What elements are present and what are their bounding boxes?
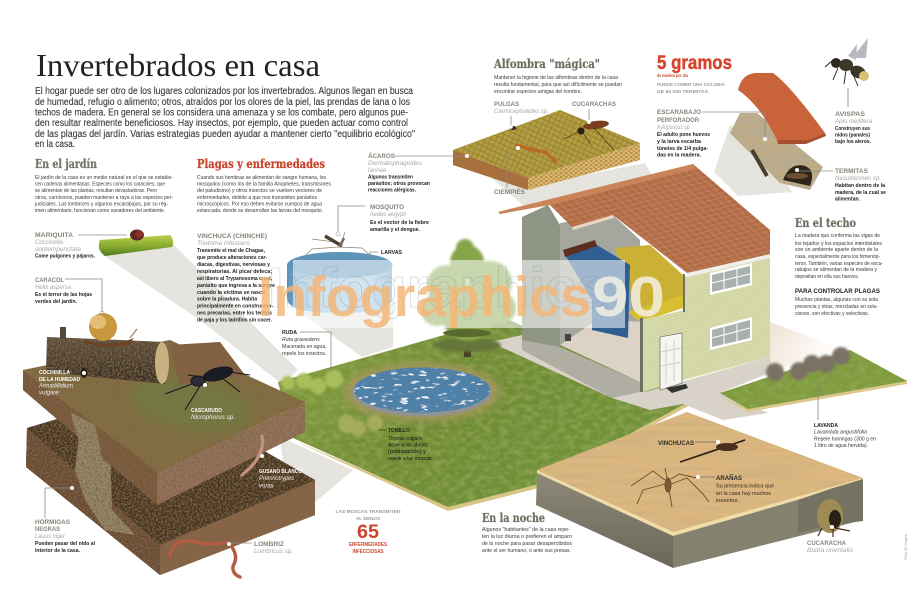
concrete path around the house <box>490 335 772 420</box>
icon: mosquito <box>306 232 372 257</box>
section: En el techo: casa, especialmente para los himenóp- <box>795 254 880 260</box>
label: Termitas: Nasutitermes sp. <box>835 176 881 182</box>
label: Vinchuca: sobre la picadura. Habita <box>197 296 257 302</box>
label: Hormigas negras: HORMIGAS <box>35 519 70 526</box>
label: Caracol: verdes del jardín. <box>35 299 78 305</box>
label: Tomillo: TOMILLO <box>388 428 410 434</box>
section: En el techo: los tejados y los espacios interdistales <box>795 241 882 247</box>
icon: wasp <box>825 38 869 86</box>
label: Hormigas negras <box>35 486 96 554</box>
stat: 65 enfermedades infecciosas <box>336 509 401 555</box>
section: Para controlar plagas <box>795 288 880 317</box>
section: En el techo: En el techo <box>795 216 856 230</box>
title: Invertebrados en casa <box>36 47 320 83</box>
intro paragraph: de las plagas del jardín. Varias estrategias pueden ayudar a mantener cierto "equilibrio ecológico" <box>35 129 415 140</box>
icon: earthworm <box>170 541 240 577</box>
stat: 65 enfermedades infecciosas: AL MENOS <box>356 516 380 521</box>
label: Vinchuca: que produce alteraciones car- <box>197 255 267 261</box>
label: Escarabajo perforador: das en la madera. <box>657 152 702 158</box>
label: Escarabajo perforador: PERFORADOR <box>657 117 699 124</box>
soil labels <box>35 370 302 555</box>
label: Avispas: AVISPAS <box>835 111 865 118</box>
section: En el techo: La madera que conforma las vigas de <box>795 233 880 239</box>
label: Mariquita <box>35 232 127 260</box>
section: Alfombra mágica <box>493 57 622 95</box>
intro paragraph: den resultar realmente beneficiosos. Hay insectos, por ejemplo, que pueden actuar como control <box>35 118 408 129</box>
stat: 5 gramos: PUEDE COMER UNA COLONIA <box>657 82 726 87</box>
inset: lower soil layer <box>26 400 315 577</box>
stat: 65 enfermedades infecciosas: 65 <box>357 522 379 543</box>
interior yellow room <box>615 245 683 318</box>
label: Lavanda: 1 litro de agua hervida). <box>814 443 868 449</box>
label: Larvas: LARVAS <box>381 250 402 256</box>
label: Ácaros: Algunos transmiten <box>368 174 413 180</box>
label: Cucaracha: CUCARACHA <box>807 540 847 547</box>
section: Alfombra mágica: Mantener la higiene de las alfombras dentro de la casa <box>494 75 618 81</box>
ant tunnel <box>75 430 135 535</box>
section: En la noche <box>482 511 572 554</box>
icon: woodlouse <box>80 368 88 378</box>
section: En el techo: rabajos se alimentan de la madera y <box>795 267 877 273</box>
intro paragraph: de humedad, refugio o alimento; otros, atraídos por los olores de la piel, las prendas de lana o los <box>35 97 410 108</box>
grassy patch on soil <box>124 369 256 441</box>
icon: termite nest <box>786 173 808 179</box>
label: Pulgas: Ctenocephalides sp. <box>494 109 549 115</box>
section: Alfombra mágica: resulta fundamental, para que así difícilmente se puedan <box>494 82 622 88</box>
section: En el techo: son un ambiente aparte dentro de la <box>795 247 878 253</box>
label: Lombriz: Lumbricus sp. <box>254 549 293 555</box>
label: Vinchuca <box>197 233 275 324</box>
label: Lombriz: LOMBRIZ <box>254 541 284 548</box>
interior back walls <box>560 215 640 345</box>
label: Vinchuca: cuando la víctima se rasca <box>197 290 265 296</box>
label: Cascarudo <box>191 383 235 421</box>
icon: ladybug <box>130 230 144 240</box>
section: En la noche: de la noche para pasar desapercibidos <box>482 541 572 547</box>
section: Para controlar plagas: Muchas plantas, algunas con su sola <box>795 297 878 303</box>
label: Vinchuca: parásito que ingresa a la sangre <box>197 283 275 289</box>
label: Avispas: Construyen sus <box>835 126 870 132</box>
label: Gusano blanco <box>259 454 302 490</box>
terracotta tile <box>738 73 825 140</box>
floor <box>560 318 640 382</box>
side lawn with lavender shrubs <box>720 347 907 412</box>
funnels: grey projection bands connecting insets to the scene <box>103 125 840 505</box>
label: Caracol: Es el terror de las hojas <box>35 292 92 298</box>
label: Vinchuca: principalmente en construccio- <box>197 304 273 310</box>
section: Alfombra mágica: Alfombra "mágica" <box>493 57 600 71</box>
label: Cucaracha: Blatta orientalis <box>807 548 853 554</box>
label: Cochinilla: Armadillidium <box>38 384 73 390</box>
section: Para controlar plagas: presencia y otras, mezcladas en solu- <box>795 304 878 310</box>
label: Lavanda <box>814 380 876 449</box>
label: Gusano blanco: vorax <box>259 484 275 490</box>
icon: spider <box>631 468 709 507</box>
bed <box>563 240 630 341</box>
label: Hormigas negras: NEGRAS <box>35 526 60 533</box>
inset: carpet block <box>453 110 640 190</box>
section: En el techo: teros. También, varias especies de esca- <box>795 261 883 267</box>
label: Cucarachas: CUCARACHAS <box>572 101 616 108</box>
label: Termitas: madera, de la cual se <box>835 190 886 196</box>
section: Para controlar plagas: PARA CONTROLAR PLAGAS <box>795 288 880 295</box>
tiled roof <box>498 164 770 277</box>
label: Vinchuca: así libero al Trypanosoma cruzi, <box>197 276 272 282</box>
label: Gusano blanco: Premnotrypes <box>259 476 294 482</box>
label: Vinchuca: nes precarias, entre los techos <box>197 310 272 316</box>
label: Caracol <box>35 277 104 315</box>
icon: flea <box>510 126 516 130</box>
label: Cochinilla: vulgare <box>39 390 59 396</box>
label: Mariquita: Come pulgones y pájaros. <box>35 254 95 260</box>
text: Plagas y enfermedades: del paludismo) y otros insectos se vuelven vectores de <box>197 188 322 194</box>
label: Cochinilla: DE LA HUMEDAD <box>39 377 80 383</box>
inset: roof tile and wood beam <box>730 73 826 190</box>
label: Mosquito: amarilla y el dengue. <box>370 227 421 233</box>
label: Ácaros: ÁCAROS <box>368 153 395 160</box>
label: Tomillo <box>378 428 433 462</box>
label: Termitas <box>795 168 886 202</box>
label: Caracol: Helix aspersa <box>35 285 72 291</box>
label: Avispas <box>834 88 873 145</box>
stat: 5 gramos <box>657 53 732 94</box>
icon: white grub <box>242 436 262 475</box>
label: Vinchuca: respiratorias. Al picar defeca; <box>197 269 272 275</box>
text: En el jardín: se alimentan de las plantas, resultan devastadoras. Pero <box>35 188 157 194</box>
label: Lavanda: LAVANDA <box>814 423 838 429</box>
front wall <box>640 257 770 392</box>
text: Plagas y enfermedades: Cuando sus hembras se alimentan de sangre humana, los <box>197 175 326 181</box>
icon: lavender shrubs <box>766 347 850 381</box>
garden shrubs (ruda and tomillo) <box>281 370 383 436</box>
label: Vinchuca: VINCHUCA (CHINCHE) <box>197 233 267 240</box>
label: Mariquita: MARIQUITA <box>35 232 74 239</box>
stat: 65 enfermedades infecciosas: LAS MOSCAS TRANSMITEN <box>336 509 401 514</box>
watermark: 90 <box>592 265 665 329</box>
section: Alfombra mágica: encontrar especies amigas del hombre. <box>494 89 582 95</box>
label: Lavanda: Repele hormigas (300 g en <box>814 436 876 442</box>
window lower <box>710 317 752 350</box>
label: Tomillo: (polinización) y <box>388 449 426 455</box>
text: En el jardín: imen alimentario, funcionan como sanadores del ambiente. <box>35 208 165 214</box>
label: Vinchuca: de paja y los ladrillos sin cocer. <box>197 318 272 324</box>
label: Larvas <box>370 250 402 258</box>
text: Plagas y enfermedades: mosquitos (como los de la familia Anopheles, transmisores <box>197 182 331 188</box>
intro paragraph: en la casa. <box>35 139 75 150</box>
label: Ruda: RUDA <box>282 330 297 336</box>
section: Para controlar plagas: ciones, son efectivas y selectivas. <box>795 311 869 317</box>
text: Plagas y enfermedades: enfermedades, debido a que nos transmiten parásitos <box>197 195 317 201</box>
label: Ácaros <box>368 153 470 194</box>
label: Arañas: Su presencia indica que <box>716 484 774 490</box>
label: Cucaracha <box>807 525 853 554</box>
text: En el jardín <box>34 175 173 214</box>
credit: ©Sol 90 Images <box>904 534 908 560</box>
label: Ruda: Ruta graveolens <box>282 337 320 343</box>
section: En el techo <box>795 216 883 280</box>
stat: 65 enfermedades infecciosas: INFECCIOSAS <box>352 549 384 555</box>
icon: centipede <box>517 145 555 161</box>
label: Ruda <box>282 330 331 372</box>
label: Cochinilla: COCHINILLA <box>39 370 70 376</box>
side wall <box>522 205 560 347</box>
inset: wood floor block <box>536 412 863 568</box>
garden lawn platform <box>278 318 692 511</box>
label: Cascarudo: CASCARUDO <box>191 408 222 414</box>
label: Mosquito: MOSQUITO <box>370 204 404 211</box>
label: Tomillo: repele a las moscas. <box>388 456 433 462</box>
label: Pulgas <box>494 101 549 129</box>
label: Mariquita: septempunctata <box>35 247 82 253</box>
label: Avispas: bajo los aleros. <box>835 139 871 145</box>
label: Avispas: Apis mellifera <box>834 119 873 125</box>
crack with vinchuca <box>680 440 745 462</box>
label: Gusano blanco: GUSANO BLANCO <box>259 469 302 475</box>
section: En la noche: Algunos "habitantes" de la casa repe- <box>482 527 570 533</box>
label: Escarabajo perforador: y la larva escarba <box>657 139 701 145</box>
label: Arañas: ARAÑAS <box>716 475 742 482</box>
section: En la noche: ante el ser humano, o ante sus presas. <box>482 548 571 554</box>
label: Vinchuca: Transmite el mal de Chagas, <box>197 248 265 254</box>
text: Plagas y enfermedades: microscópicos. Por eso deben evitarse cuerpos de agua <box>197 202 322 208</box>
label: Hormigas negras: Pueden pasar del nido al <box>35 541 96 547</box>
tunnel top <box>70 412 105 470</box>
label: Pulgas: PULGAS <box>494 101 519 108</box>
intro paragraph: El hogar puede ser otro de los lugares colonizados por los invertebrados. Algunos llegan en busca <box>35 86 413 97</box>
label: Termitas: alimentan. <box>835 196 860 202</box>
stat: 5 gramos: de madera por día <box>657 73 688 78</box>
stat: 65 enfermedades infecciosas: ENFERMEDADES <box>349 542 388 548</box>
label: Arañas <box>696 475 774 504</box>
label: Ácaros: Dermatophagoides <box>368 161 422 167</box>
carpet labels <box>494 101 616 196</box>
section: En la noche: En la noche <box>482 511 545 525</box>
text: En el jardín: otros, carnívoros, pueden mantener a raya a las especies per- <box>35 195 173 201</box>
inset: green stem with ladybug <box>99 230 173 256</box>
watermark: Infographics <box>268 256 608 320</box>
label: Mariquita: Coccinella <box>35 240 64 246</box>
log <box>46 327 169 384</box>
label: Termitas: TERMITAS <box>835 168 868 175</box>
window upper <box>710 263 752 295</box>
intro paragraph: techos de madera. En general se los considera una amenaza y se los combate, pero algunos pue- <box>35 108 408 118</box>
label: Mosquito <box>336 204 429 236</box>
text: En el jardín: judiciales. Las lombrices y algunos escarabajos, por su rég- <box>34 202 168 208</box>
door <box>660 333 688 393</box>
label: Hormigas negras: Lasius niger <box>35 534 66 540</box>
label: Tomillo: Atrae a las abejas <box>388 442 428 448</box>
section: En la noche: len la luz diurna o prefieren el amparo <box>482 534 572 540</box>
icon: cockroach <box>564 119 614 150</box>
label: Escarabajo perforador: El adulto pone huevos <box>657 132 710 138</box>
intro paragraph <box>35 86 415 150</box>
label: Tomillo: Thymus vulgaris <box>388 436 422 442</box>
label: Escarabajo perforador: Xylopsocus sp. <box>656 125 691 131</box>
tree <box>421 239 516 357</box>
label: Ciempiés: CIEMPIÉS <box>494 188 525 196</box>
heading: Plagas y enfermedades: Plagas y enfermedades <box>197 157 325 171</box>
label: Ruda: Macerada en agua, <box>282 344 327 350</box>
text: En el jardín: El jardín de la casa es un medio natural en el que se estable- <box>35 175 173 181</box>
label: Avispas: nidos (panales) <box>835 132 870 138</box>
label: Vinchuca: díacas, digestivas, nerviosas y <box>197 262 270 268</box>
label: Vinchucas <box>658 440 720 447</box>
watermark: Infographics <box>258 265 591 329</box>
label: Mosquito: Es el vector de la fiebre <box>370 220 429 226</box>
label: Lombriz <box>227 541 293 555</box>
label: Arañas: en la casa hay muchos <box>716 491 771 497</box>
label: Escarabajo perforador: túneles de 1/4 pulga- <box>657 146 708 152</box>
label: Escarabajo perforador <box>656 109 767 158</box>
label: Escarabajo perforador: ESCARABAJO <box>657 109 701 116</box>
heading: En el jardín: En el jardín <box>35 157 97 171</box>
house cutaway <box>498 164 770 398</box>
label: Vinchuca: Triatoma infestans <box>197 241 250 247</box>
label: Lavanda: Lavandula angustifolia <box>814 430 867 436</box>
label: Caracol: CARACOL <box>35 277 64 284</box>
label: Ácaros: reacciones alérgicas. <box>368 188 416 194</box>
stat: 5 gramos: DE 64 000 TERMITAS <box>657 89 708 94</box>
inset: water cylinder with mosquito <box>287 232 392 313</box>
text: En el jardín: cen cadenas alimentarias. Especies como los caracoles, que <box>35 182 165 188</box>
label: Cascarudo: Nicrophorus sp. <box>191 415 235 421</box>
label: Vinchucas: VINCHUCAS <box>658 440 694 447</box>
label: Ruda: repele los insectos. <box>282 351 326 357</box>
text: Plagas y enfermedades <box>197 175 331 214</box>
label: Termitas: Habitan dentro de la <box>835 183 885 189</box>
pond in the lawn <box>344 363 500 421</box>
label: Mosquito: Aedes aegypti <box>369 212 407 218</box>
inset: upper soil layer with log and snail <box>23 313 305 505</box>
text: Plagas y enfermedades: estancada, donde se desarrollan las larvas del mosquito. <box>197 208 323 214</box>
icon: snail <box>85 313 137 347</box>
label: Ácaros: farinae <box>368 168 387 174</box>
label: Cochinilla <box>38 370 86 396</box>
stat: 5 gramos: 5 gramos <box>657 53 732 74</box>
label: Hormigas negras: interior de la casa. <box>35 548 80 554</box>
icon: beetle <box>165 364 250 410</box>
icon: pipe with cockroach <box>798 479 863 537</box>
label: Ácaros: parásitos; otros provocan <box>368 181 430 187</box>
label: Arañas: insectos. <box>716 498 739 504</box>
section: En el techo: depositan en ella sus huevos. <box>795 274 859 280</box>
